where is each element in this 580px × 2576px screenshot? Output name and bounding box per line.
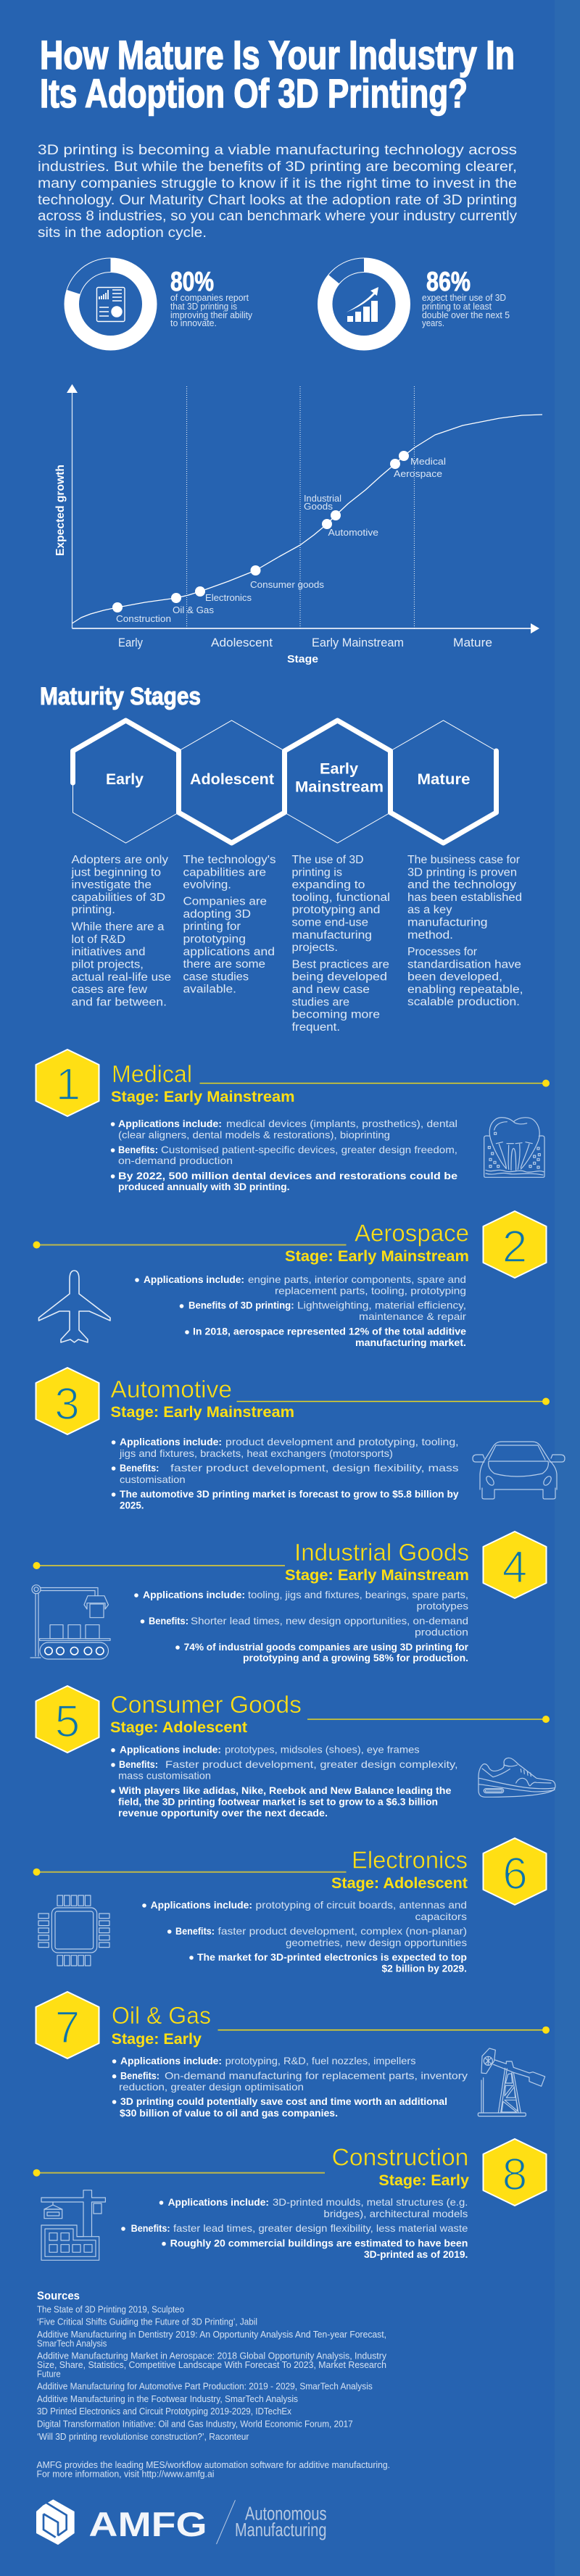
stage: early mainstream: Stage: Early Mainstream bbox=[111, 1089, 294, 1105]
text: automotive details: jigs and fixtures, brackets, heat exchangers (motorsports) bbox=[119, 1447, 393, 1459]
stat: 80%: 80% bbox=[170, 267, 214, 296]
text: mature stage description bbox=[407, 854, 523, 1008]
axis title: expected growth: Expected growth bbox=[54, 465, 67, 556]
panel: 2 aerospace bbox=[33, 1211, 547, 1348]
stage: early: Stage: Early bbox=[378, 2172, 469, 2189]
text: early stage description: initiatives and bbox=[71, 946, 145, 958]
text: consumer goods details: mass customisation bbox=[118, 1770, 211, 1782]
stage: adolescent: Stage: Adolescent bbox=[331, 1875, 468, 1892]
text: early mainstream stage description bbox=[291, 854, 390, 1034]
text: about AMFG: For more information, visit http://www.amfg.ai bbox=[36, 2469, 215, 2479]
sources: Additive Manufacturing in the Footwear Industry, SmarTech Analysis bbox=[37, 2394, 298, 2404]
title: Its Adoption Of 3D Printing? bbox=[40, 70, 468, 116]
number badge 7: 7 bbox=[55, 2003, 80, 2053]
text: consumer goods details: Faster product development, greater design complexity, bbox=[165, 1758, 458, 1770]
text: electronics details: $2 billion by 2029. bbox=[381, 1963, 467, 1974]
sources: Future bbox=[37, 2369, 61, 2379]
text: early mainstream stage description: projects. bbox=[291, 942, 338, 954]
text: oil and gas details: $30 billion of value to oil and gas companies. bbox=[120, 2107, 338, 2119]
sources: Additive Manufacturing Market in Aerospace: 2018 Global Opportunity Analysis, Industry bbox=[37, 2351, 387, 2361]
text: medical details: on-demand production bbox=[118, 1155, 233, 1166]
text: industrial goods details bbox=[134, 1589, 469, 1663]
text: automotive details bbox=[112, 1436, 459, 1511]
text: aerospace details: Applications include: bbox=[144, 1274, 244, 1285]
title bbox=[40, 32, 515, 116]
text: industrial goods details: Shorter lead times, new design opportunities, on-demand bbox=[191, 1615, 468, 1626]
intro paragraph: across 8 industries, so you can benchmark where your industry currently bbox=[38, 209, 518, 224]
text: adolescent stage description: Companies are bbox=[183, 896, 267, 908]
data labels: Electronics bbox=[205, 592, 252, 603]
text: automotive details: faster product development, design flexibility, mass bbox=[170, 1462, 459, 1474]
text: early mainstream stage description: some end-use bbox=[291, 916, 368, 929]
stat: 86%: 86% bbox=[426, 267, 471, 296]
text: electronics details: faster product development, complex (non-planar) bbox=[218, 1925, 467, 1937]
sources: Sources bbox=[37, 2290, 80, 2303]
text: consumer goods details: prototypes, midsoles (shoes), eye frames bbox=[225, 1744, 420, 1756]
sources: Size, Share, Statistics, Competitive Landscape With Forecast To 2023, Market Research bbox=[37, 2360, 386, 2370]
stat: 86%: double over the next 5 bbox=[422, 310, 510, 320]
text: electronics details: The market for 3D-printed electronics is expected to top bbox=[197, 1951, 467, 1963]
text: consumer goods details: With players like adidas, Nike, Reebok and New Balance leading the bbox=[119, 1784, 452, 1796]
panel: 6 electronics bbox=[33, 1838, 547, 1974]
text: adolescent stage description: applications and bbox=[183, 946, 275, 958]
text: adolescent stage description: adopting 3D bbox=[183, 908, 251, 921]
text: medical details: Applications include: bbox=[118, 1118, 222, 1129]
sources bbox=[37, 2290, 387, 2442]
stage labels: Early bbox=[118, 636, 144, 649]
text: early mainstream stage description: tooling, functional bbox=[291, 892, 390, 904]
number badge 6: 6 bbox=[502, 1849, 528, 1899]
text: adolescent stage description: prototyping bbox=[183, 934, 246, 945]
hexagons: four maturity stages: Adolescent bbox=[190, 771, 274, 788]
text: about AMFG: AMFG provides the leading MES/workflow automation software for additive manufacturing. bbox=[36, 2460, 390, 2470]
data points bbox=[112, 451, 409, 612]
text: oil and gas details: reduction, greater design optimisation bbox=[119, 2081, 304, 2093]
chart: maturity curve bbox=[54, 384, 542, 665]
text: early mainstream stage description: being developed bbox=[291, 971, 387, 984]
icon: car bbox=[473, 1442, 565, 1499]
text: early stage description: While there are a bbox=[71, 921, 165, 934]
text: automotive details: product development and prototyping, tooling, bbox=[225, 1436, 459, 1447]
stage: early: Stage: Early bbox=[112, 2031, 202, 2048]
text: early mainstream stage description: Best practices are bbox=[291, 958, 389, 971]
text: early mainstream stage description: manufacturing bbox=[291, 929, 372, 942]
text: electronics details: Applications include: bbox=[151, 1899, 252, 1911]
number badge 5 bbox=[36, 1686, 99, 1753]
text: automotive details: Benefits: bbox=[120, 1462, 159, 1474]
text: automotive details: customisation bbox=[120, 1474, 186, 1485]
stage: early mainstream: Stage: Early Mainstream bbox=[285, 1567, 469, 1584]
text: construction details: bridges), architectural models bbox=[323, 2208, 468, 2219]
text: automotive details: Applications include: bbox=[120, 1436, 222, 1447]
text: oil and gas details: Benefits: bbox=[120, 2070, 160, 2082]
stat: 86%: years. bbox=[422, 318, 444, 328]
sources: The State of 3D Printing 2019, Sculpteo bbox=[37, 2305, 184, 2315]
text: early mainstream stage description: becoming more bbox=[291, 1009, 380, 1021]
text: industrial goods details: Applications include: bbox=[143, 1589, 245, 1600]
panel: 1 medical bbox=[36, 1050, 550, 1192]
text: construction details: Applications include: bbox=[168, 2196, 269, 2208]
text: construction details: Roughly 20 commercial buildings are estimated to have been bbox=[170, 2238, 468, 2249]
text: adolescent stage description: available. bbox=[183, 984, 236, 996]
intro paragraph: sits in the adoption cycle. bbox=[38, 225, 207, 241]
icon: AMFG mark bbox=[36, 2499, 75, 2545]
heading: medical: Medical bbox=[112, 1060, 192, 1087]
text: mature stage description: standardisation have bbox=[407, 958, 521, 971]
stage: adolescent: Stage: Adolescent bbox=[110, 1719, 247, 1736]
text: aerospace details: In 2018, aerospace represented 12% of the total additive bbox=[193, 1326, 466, 1337]
panel: 7 oil and gas bbox=[36, 1992, 550, 2119]
intro paragraph: technology. Our Maturity Chart looks at the adoption rate of 3D printing bbox=[38, 193, 517, 208]
text: early stage description: cases are few bbox=[71, 984, 148, 996]
heading: oil and gas: Oil & Gas bbox=[112, 2002, 211, 2029]
text: electronics details bbox=[142, 1899, 467, 1974]
data labels: Goods bbox=[304, 501, 334, 512]
text: mature stage description: scalable production. bbox=[407, 996, 520, 1008]
stat: 80%: of companies report bbox=[170, 293, 249, 303]
data labels: Oil & Gas bbox=[173, 604, 215, 615]
text: electronics details: capacitors bbox=[415, 1911, 467, 1922]
text: mature stage description: as a key bbox=[407, 904, 452, 916]
text: electronics details: geometries, new design opportunities bbox=[286, 1937, 467, 1948]
data labels: Automotive bbox=[328, 527, 378, 538]
data labels: Consumer goods bbox=[250, 579, 325, 590]
stage labels: Early Mainstream bbox=[312, 636, 404, 649]
text: early stage description: and far between. bbox=[71, 996, 167, 1008]
number badge 1: 1 bbox=[56, 1060, 80, 1110]
text: automotive details: The automotive 3D printing market is forecast to grow to $5.8 billion by bbox=[120, 1488, 459, 1500]
text: medical details: By 2022, 500 million dental devices and restorations could be bbox=[118, 1170, 457, 1181]
intro paragraph: many companies struggle to know if it is the right time to invest in the bbox=[38, 176, 517, 191]
data labels: Industrial bbox=[304, 493, 341, 504]
text: construction details bbox=[121, 2196, 468, 2260]
text: mature stage description: The business case for bbox=[407, 854, 520, 866]
logo: AMFG bbox=[36, 2499, 327, 2545]
text: early stage description: investigate the bbox=[71, 879, 152, 892]
number badge 8 bbox=[483, 2139, 547, 2206]
text: early stage description: Adopters are only bbox=[71, 854, 168, 866]
text: aerospace details: manufacturing market. bbox=[355, 1337, 466, 1348]
text: consumer goods details: field, the 3D printing footwear market is set to grow to a $6.3 billion bbox=[118, 1796, 438, 1808]
icon: airplane bbox=[39, 1271, 110, 1342]
text: aerospace details: engine parts, interior components, spare and bbox=[248, 1274, 466, 1285]
text: adolescent stage description: The technology's bbox=[183, 854, 276, 866]
number badge 2 bbox=[483, 1211, 547, 1278]
text: early stage description: capabilities of 3D bbox=[71, 892, 165, 904]
panel: 4 industrial goods bbox=[30, 1532, 547, 1663]
text: aerospace details bbox=[135, 1274, 466, 1348]
text: medical details: (clear aligners, dental models & restorations), bioprinting bbox=[118, 1129, 390, 1141]
text: mature stage description: manufacturing bbox=[407, 916, 487, 929]
heading: consumer goods: Consumer Goods bbox=[110, 1691, 302, 1718]
text: aerospace details: maintenance & repair bbox=[359, 1310, 466, 1322]
hexagons: four maturity stages bbox=[72, 720, 496, 843]
icon: report bbox=[97, 287, 125, 322]
text: electronics details: Benefits: bbox=[175, 1925, 215, 1937]
stat: 80%: that 3D printing is bbox=[170, 302, 237, 312]
intro paragraph: industries. But while the benefits of 3D printing are becoming clearer, bbox=[38, 159, 517, 175]
text: consumer goods details bbox=[111, 1744, 458, 1819]
text: mature stage description: method. bbox=[407, 929, 453, 942]
number badge 5: 5 bbox=[55, 1697, 80, 1747]
text: medical details: produced annually with 3D printing. bbox=[118, 1181, 290, 1192]
text: adolescent stage description: evolving. bbox=[183, 879, 231, 892]
hexagons: four maturity stages: Mainstream bbox=[295, 778, 384, 796]
text: mature stage description: enabling repeatable, bbox=[407, 984, 523, 996]
text: consumer goods details: revenue opportunity over the next decade. bbox=[118, 1807, 328, 1819]
stat: 80%: improving their ability bbox=[170, 310, 253, 320]
text: electronics details: prototyping of circuit boards, antennas and bbox=[255, 1899, 467, 1911]
hexagons: four maturity stages: Early bbox=[106, 771, 144, 788]
icon: microchip bbox=[38, 1895, 109, 1966]
text: oil and gas details: prototyping, R&D, fuel nozzles, impellers bbox=[225, 2055, 416, 2066]
text: early mainstream stage description: frequent. bbox=[291, 1021, 340, 1034]
text: industrial goods details: prototypes bbox=[416, 1600, 468, 1612]
data labels: Aerospace bbox=[394, 468, 442, 479]
stat: 80% bbox=[65, 258, 253, 350]
text: consumer goods details: Applications include: bbox=[120, 1744, 221, 1756]
sources: 3D Printed Electronics and Circuit Prototyping 2019-2029, IDTechEx bbox=[37, 2406, 292, 2417]
stage: early mainstream: Stage: Early Mainstream bbox=[285, 1248, 469, 1265]
data labels: Construction bbox=[116, 613, 171, 624]
number badge 7 bbox=[36, 1992, 99, 2058]
sources: Additive Manufacturing in Dentistry 2019: An Opportunity Analysis And Ten-year Forecast, bbox=[37, 2330, 386, 2340]
text: consumer goods details: Benefits: bbox=[119, 1758, 158, 1770]
text: oil and gas details: Applications include: bbox=[120, 2055, 222, 2066]
sources: ‘Five Critical Shifts Guiding the Future of 3D Printing’, Jabil bbox=[37, 2317, 257, 2327]
text: early mainstream stage description: expanding to bbox=[291, 879, 365, 892]
text: medical details: medical devices (implants, prosthetics), dental bbox=[226, 1118, 457, 1129]
sources: Digital Transformation Initiative: Oil and Gas Industry, World Economic Forum, 2017 bbox=[37, 2419, 353, 2430]
text: early mainstream stage description: studies are bbox=[291, 996, 349, 1008]
text: early stage description: lot of R&D bbox=[71, 934, 125, 946]
number badge 2: 2 bbox=[502, 1222, 527, 1272]
text: adolescent stage description: there are some bbox=[183, 958, 265, 971]
text: mature stage description: Processes for bbox=[407, 946, 477, 958]
donut chart: 80% bbox=[65, 258, 157, 350]
sources: SmarTech Analysis bbox=[37, 2338, 107, 2348]
stat: 86% bbox=[318, 258, 510, 350]
text: mature stage description: 3D printing is proven bbox=[407, 866, 517, 878]
text: construction details: 3D-printed as of 2019. bbox=[364, 2248, 468, 2260]
stat: 80%: to innovate. bbox=[170, 318, 217, 328]
number badge 6 bbox=[483, 1838, 547, 1905]
text: medical details bbox=[111, 1118, 457, 1192]
number badge 1 bbox=[36, 1050, 99, 1116]
intro paragraph bbox=[38, 143, 518, 241]
icon: crane and building bbox=[41, 2190, 105, 2260]
icon: oil pump jack bbox=[478, 2048, 545, 2116]
stage labels: Mature bbox=[453, 636, 492, 649]
stage labels: Adolescent bbox=[211, 636, 273, 649]
text: early mainstream stage description: and new case bbox=[291, 984, 370, 996]
text: mature stage description: has been established bbox=[407, 892, 522, 904]
text: early mainstream stage description: The use of 3D bbox=[291, 854, 364, 866]
text: early mainstream stage description: prototyping and bbox=[291, 904, 380, 916]
panel: 5 consumer goods bbox=[36, 1686, 555, 1819]
sources: Additive Manufacturing for Automotive Part Production: 2019 - 2029, SmarTech Analysis bbox=[37, 2382, 373, 2392]
stat: 86%: expect their use of 3D bbox=[422, 293, 506, 303]
data labels: Medical bbox=[410, 456, 446, 467]
text: industrial goods details: prototyping and a growing 58% for production. bbox=[243, 1652, 468, 1663]
sources: ‘Will 3D printing revolutionise construction?’, Raconteur bbox=[37, 2432, 249, 2442]
donut chart: 86% bbox=[318, 258, 410, 350]
heading: aerospace: Aerospace bbox=[355, 1219, 469, 1247]
text: oil and gas details bbox=[112, 2055, 468, 2119]
text: industrial goods details: tooling, jigs and fixtures, bearings, spare parts, bbox=[248, 1589, 468, 1600]
icon: growth bars and arrow bbox=[347, 287, 378, 322]
text: early stage description: printing. bbox=[71, 904, 115, 916]
text: industrial goods details: production bbox=[415, 1626, 468, 1638]
intro paragraph: 3D printing is becoming a viable manufacturing technology across bbox=[38, 143, 517, 158]
icon: tooth bbox=[484, 1118, 544, 1177]
stage labels bbox=[118, 636, 492, 649]
number badge 4: 4 bbox=[502, 1542, 527, 1592]
text: adolescent stage description: capabilities are bbox=[183, 866, 266, 878]
text: early stage description bbox=[70, 854, 171, 1008]
hexagons: four maturity stages: Early bbox=[320, 761, 358, 777]
panel: 3 automotive bbox=[36, 1368, 565, 1511]
axis title: stage: Stage bbox=[287, 653, 318, 665]
text: early stage description: just beginning to bbox=[70, 866, 161, 878]
text: medical details: Benefits: bbox=[118, 1144, 158, 1155]
text: adolescent stage description: case studies bbox=[183, 971, 249, 983]
stage: early mainstream: Stage: Early Mainstream bbox=[110, 1404, 294, 1421]
logo: AMFG: Manufacturing bbox=[235, 2519, 326, 2540]
number badge 3 bbox=[36, 1368, 99, 1434]
icon: robotic assembly line bbox=[30, 1585, 110, 1659]
text: aerospace details: Lightweighting, material efficiency, bbox=[297, 1300, 466, 1311]
stat: 86%: printing to at least bbox=[422, 302, 492, 312]
heading: electronics: Electronics bbox=[352, 1847, 468, 1874]
text: oil and gas details: On-demand manufacturing for replacement parts, inventory bbox=[165, 2070, 468, 2082]
text: construction details: faster lead times, greater design flexibility, less material waste bbox=[173, 2222, 468, 2234]
text: adolescent stage description bbox=[183, 854, 276, 996]
heading: maturity stages: Maturity Stages bbox=[40, 683, 201, 710]
text: medical details: Customised patient-specific devices, greater design freedom, bbox=[161, 1144, 457, 1155]
number badge 4 bbox=[483, 1532, 547, 1598]
text: early stage description: pilot projects, bbox=[71, 958, 144, 971]
growth curve bbox=[72, 415, 542, 623]
icon: sneaker bbox=[478, 1758, 555, 1797]
text: early mainstream stage description: printing is bbox=[291, 866, 342, 878]
hexagons: four maturity stages: Mature bbox=[418, 771, 470, 788]
number badge 8: 8 bbox=[502, 2150, 527, 2200]
text: construction details: Benefits: bbox=[131, 2222, 170, 2234]
heading: industrial goods: Industrial Goods bbox=[294, 1539, 469, 1566]
text: early stage description: actual real-life use bbox=[71, 971, 171, 984]
text: about AMFG bbox=[36, 2460, 390, 2479]
heading: construction: Construction bbox=[332, 2144, 468, 2171]
text: aerospace details: Benefits of 3D printing: bbox=[188, 1300, 294, 1311]
number badge 3: 3 bbox=[54, 1379, 80, 1429]
heading: automotive: Automotive bbox=[110, 1376, 232, 1403]
chart axes bbox=[67, 384, 539, 633]
text: mature stage description: and the technology bbox=[407, 879, 516, 892]
panel: 8 construction bbox=[33, 2139, 547, 2260]
text: construction details: 3D-printed moulds, metal structures (e.g. bbox=[273, 2196, 468, 2208]
text: adolescent stage description: printing for bbox=[183, 921, 241, 933]
text: aerospace details: replacement parts, tooling, prototyping bbox=[275, 1284, 466, 1296]
data labels bbox=[116, 456, 446, 624]
text: automotive details: 2025. bbox=[120, 1500, 144, 1511]
text: mature stage description: been developed, bbox=[407, 971, 502, 984]
logo: AMFG: Autonomous bbox=[245, 2503, 326, 2525]
text: industrial goods details: 74% of industrial goods companies are using 3D printing for bbox=[184, 1641, 469, 1653]
text: oil and gas details: 3D printing could potentially save cost and time worth an additional bbox=[120, 2095, 447, 2107]
text: industrial goods details: Benefits: bbox=[149, 1615, 188, 1626]
logo: AMFG: AMFG bbox=[88, 2505, 207, 2543]
